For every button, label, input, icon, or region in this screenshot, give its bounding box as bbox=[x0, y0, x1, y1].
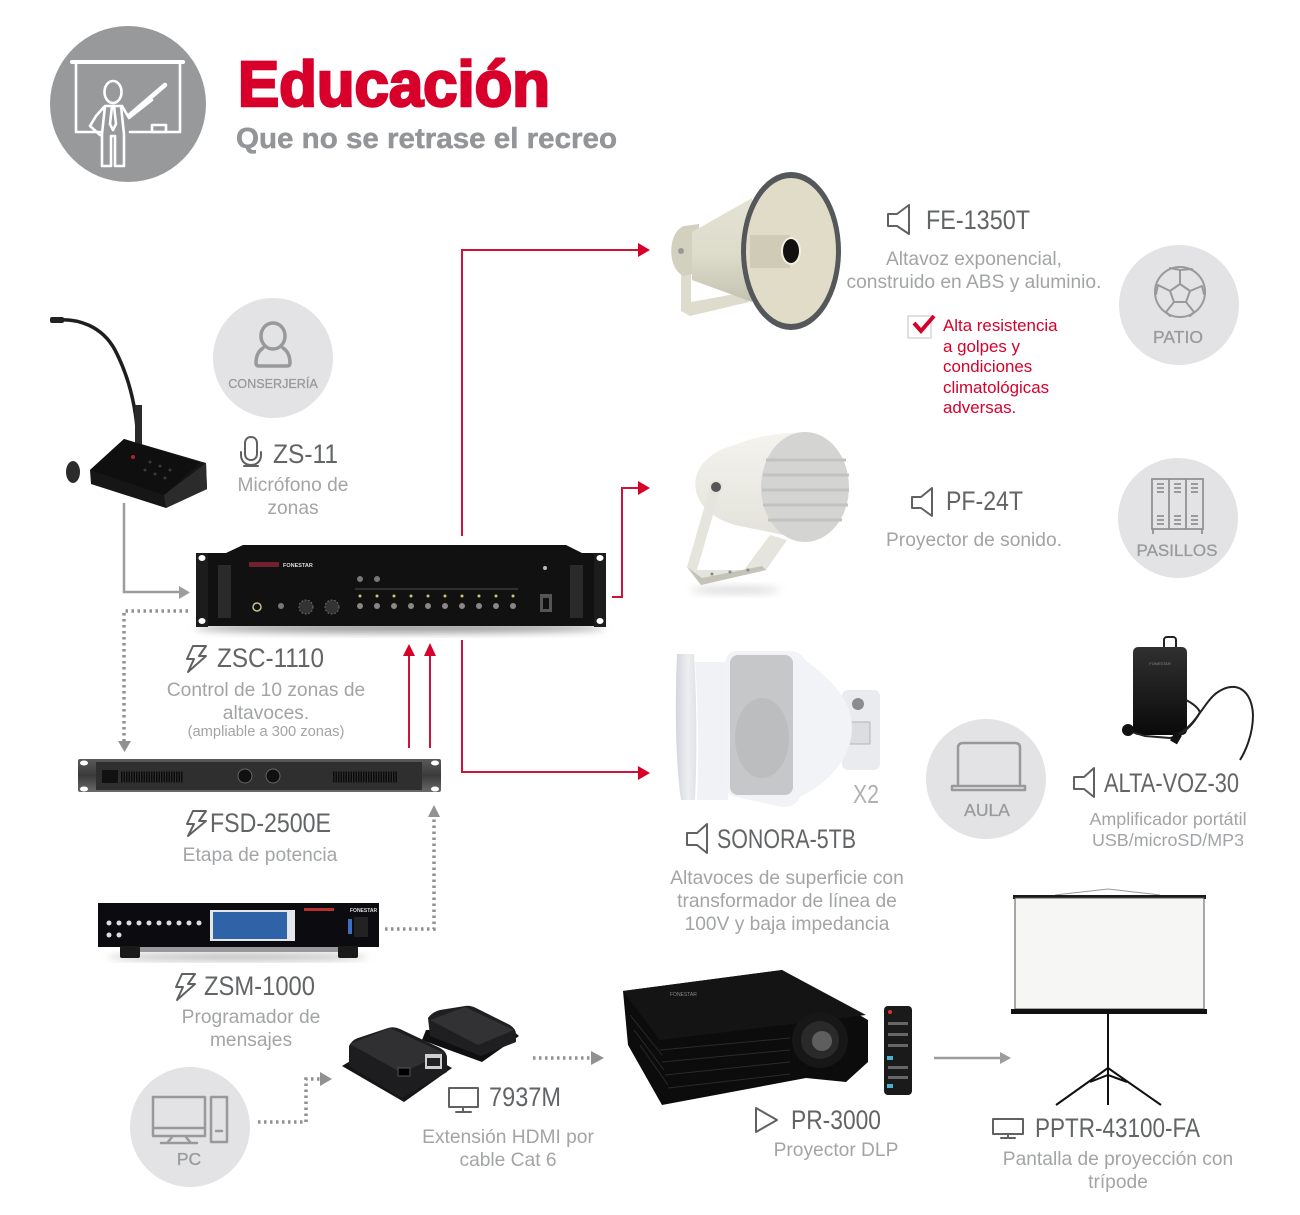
header icon: teacher at board bbox=[50, 26, 206, 182]
device: mixer amplifier ZSC-1110 bbox=[195, 545, 606, 633]
connector: message programmer to power amplifier (dotted) bbox=[385, 805, 440, 929]
description: FE-1350T: Altavoz exponencial, bbox=[886, 249, 1062, 270]
feature: resistance text: adversas. bbox=[943, 398, 1016, 417]
device: message programmer ZSM-1000 bbox=[98, 903, 379, 960]
icon: speaker bbox=[1074, 768, 1094, 797]
feature: resistance text: Alta resistencia bbox=[943, 316, 1058, 335]
device: portable amplifier ALTA-VOZ-30: FONESTAR bbox=[1149, 661, 1171, 666]
device: projector PR-3000 bbox=[623, 970, 868, 1105]
device: zone microphone ZS-11 bbox=[50, 317, 207, 508]
label: PPTR-43100-FA: PPTR-43100-FA bbox=[1035, 1113, 1200, 1143]
icon: laptop bbox=[952, 743, 1025, 790]
label: ZS-11 bbox=[241, 437, 338, 469]
description: FSD-2500E: Etapa de potencia bbox=[183, 845, 338, 866]
feature: resistance text: condiciones bbox=[943, 357, 1032, 376]
label: 7937M: 7937M bbox=[489, 1082, 561, 1112]
device: mixer amplifier ZSC-1110: FONESTAR bbox=[283, 563, 313, 569]
zone: conserjería bbox=[213, 298, 333, 418]
zone: patio bbox=[1119, 245, 1239, 365]
icon: monitor bbox=[993, 1119, 1023, 1138]
label: PF-24T bbox=[912, 486, 1023, 516]
zone: PC bbox=[130, 1067, 250, 1187]
connector: HDMI extender to projector (dotted) bbox=[533, 1051, 604, 1065]
icon: speaker bbox=[687, 824, 707, 853]
zone: conserjería: CONSERJERÍA bbox=[228, 376, 318, 391]
description: ALTA-VOZ-30: USB/microSD/MP3 bbox=[1092, 830, 1244, 850]
label: SONORA-5TB bbox=[687, 824, 856, 854]
description: ZSC-1110: altavoces. bbox=[223, 703, 309, 724]
description: FE-1350T: construido en ABS y aluminio. bbox=[847, 272, 1101, 293]
zone: PC: PC bbox=[177, 1149, 201, 1169]
device: power amplifier FSD-2500E bbox=[78, 759, 441, 792]
label: ALTA-VOZ-30 bbox=[1074, 768, 1239, 798]
connector: mixer to power amplifier (dotted) bbox=[118, 611, 188, 752]
device: HDMI extender 7937M bbox=[342, 1006, 519, 1102]
connector: PC to HDMI extender (dotted) bbox=[258, 1072, 332, 1122]
icon: lightning bolt bbox=[187, 646, 206, 672]
icon: lockers bbox=[1152, 479, 1203, 534]
subtitle: Que no se retrase el recreo bbox=[236, 123, 617, 155]
icon: person bbox=[256, 323, 290, 366]
icon: monitor bbox=[449, 1088, 478, 1112]
description: PPTR-43100-FA: trípode bbox=[1088, 1172, 1148, 1193]
label: ALTA-VOZ-30: ALTA-VOZ-30 bbox=[1104, 768, 1239, 798]
device: surface speakers SONORA-5TB bbox=[676, 651, 880, 807]
device: projector PR-3000: FONESTAR bbox=[670, 992, 697, 998]
description: ZSC-1110: (ampliable a 300 zonas) bbox=[188, 724, 344, 740]
description: PF-24T: Proyector de sonido. bbox=[886, 530, 1062, 551]
label: ZSC-1110: ZSC-1110 bbox=[217, 643, 324, 673]
label: PPTR-43100-FA bbox=[993, 1113, 1200, 1143]
description: SONORA-5TB: Altavoces de superficie con bbox=[670, 868, 904, 889]
connector: microphone to mixer bbox=[124, 503, 190, 599]
icon: speaker bbox=[912, 488, 932, 516]
label: PF-24T: PF-24T bbox=[946, 486, 1023, 516]
device: sound projector PF-24T bbox=[687, 432, 849, 594]
connector: power amplifier up to mixer bbox=[403, 643, 436, 748]
label: 7937M bbox=[449, 1082, 561, 1112]
device: portable amplifier ALTA-VOZ-30 bbox=[1122, 637, 1253, 760]
label: FE-1350T: FE-1350T bbox=[926, 205, 1030, 235]
icon: play triangle bbox=[756, 1108, 777, 1132]
icon: desktop computer bbox=[153, 1097, 227, 1143]
icon: football bbox=[1155, 267, 1205, 317]
quantity: x2: X2 bbox=[853, 779, 879, 809]
connector: projector to screen bbox=[934, 1052, 1011, 1064]
description: 7937M: cable Cat 6 bbox=[459, 1150, 557, 1171]
device: message programmer ZSM-1000: FONESTAR bbox=[350, 908, 378, 914]
zone: pasillos: PASILLOS bbox=[1137, 541, 1217, 560]
description: ZS-11: zonas bbox=[267, 498, 319, 519]
feature: check mark bbox=[908, 316, 934, 338]
device: remote control bbox=[884, 1006, 912, 1095]
description: SONORA-5TB: 100V y baja impedancia bbox=[685, 914, 890, 935]
label: PR-3000 bbox=[756, 1105, 881, 1135]
description: ZSC-1110: Control de 10 zonas de bbox=[167, 680, 365, 701]
description: ZSM-1000: Programador de bbox=[182, 1007, 320, 1028]
feature: resistance text: climatológicas bbox=[943, 378, 1049, 397]
description: SONORA-5TB: transformador de línea de bbox=[677, 891, 897, 912]
description: PPTR-43100-FA: Pantalla de proyección con bbox=[1003, 1149, 1233, 1170]
feature: resistance text: a golpes y bbox=[943, 337, 1021, 356]
description: 7937M: Extensión HDMI por bbox=[422, 1127, 594, 1148]
zone: patio: PATIO bbox=[1153, 327, 1203, 347]
icon: lightning bolt bbox=[187, 811, 206, 836]
zone: pasillos bbox=[1118, 458, 1238, 578]
label: ZS-11: ZS-11 bbox=[273, 439, 338, 469]
description: ZSM-1000: mensajes bbox=[210, 1030, 292, 1051]
description: ALTA-VOZ-30: Amplificador portátil bbox=[1089, 809, 1247, 829]
label: FE-1350T bbox=[888, 205, 1030, 235]
label: ZSM-1000: ZSM-1000 bbox=[204, 971, 315, 1001]
label: SONORA-5TB: SONORA-5TB bbox=[717, 824, 856, 854]
icon: lightning bolt bbox=[176, 974, 195, 1000]
zone: aula bbox=[926, 719, 1046, 839]
device: tripod projection screen bbox=[1011, 889, 1207, 1105]
connector: amplifier to sound projector bbox=[612, 481, 650, 597]
description: ZS-11: Micrófono de bbox=[238, 475, 348, 496]
connector: amplifier to surface speakers bbox=[462, 640, 650, 780]
icon: microphone bbox=[241, 437, 261, 466]
connector: amplifier to horn speaker bbox=[462, 243, 650, 536]
label: PR-3000: PR-3000 bbox=[791, 1105, 881, 1135]
device: horn speaker FE-1350T bbox=[671, 172, 841, 330]
label: FSD-2500E: FSD-2500E bbox=[210, 808, 331, 838]
icon: speaker bbox=[888, 205, 909, 234]
description: PR-3000: Proyector DLP bbox=[774, 1140, 898, 1161]
title: Educación bbox=[238, 48, 550, 120]
zone: aula: AULA bbox=[964, 800, 1010, 820]
